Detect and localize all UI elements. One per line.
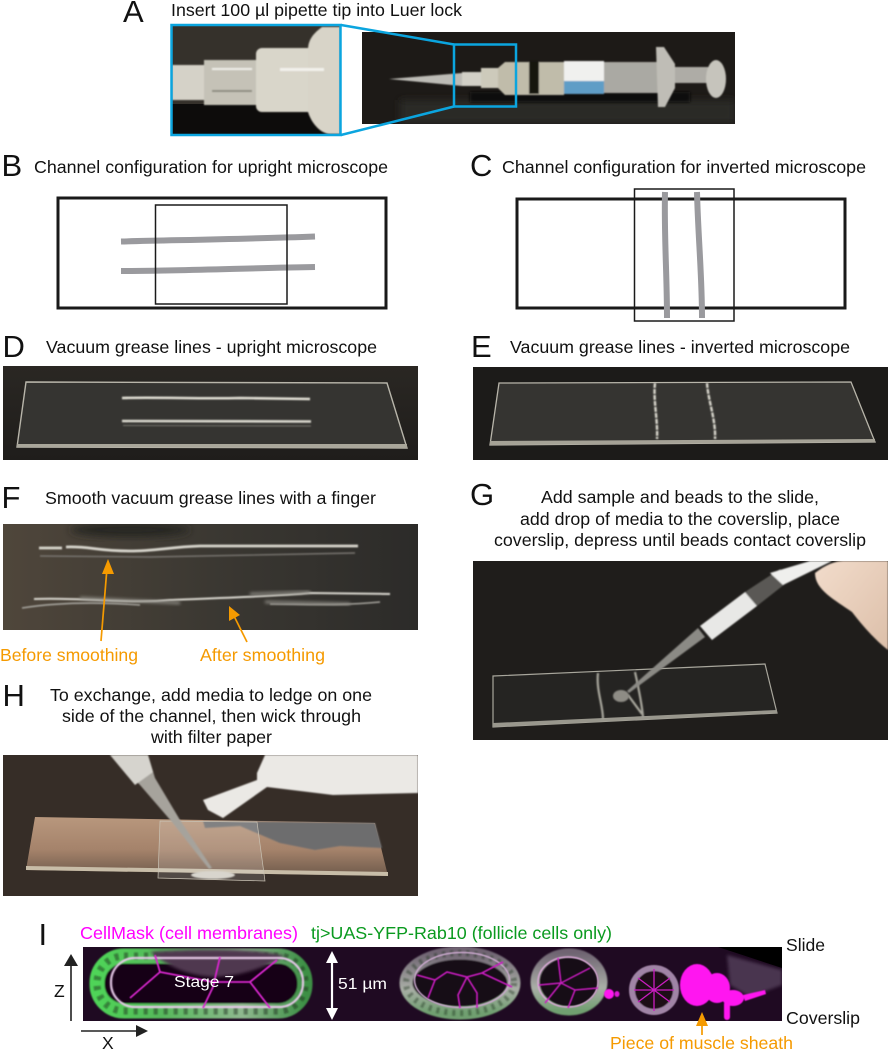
photo E <box>473 367 888 460</box>
heading G: Add sample and beads to the slide, <box>541 487 819 507</box>
muscle sheath <box>680 964 766 1020</box>
egg chamber: third <box>535 953 620 1011</box>
heading G: add drop of media to the coverslip, place <box>520 509 840 529</box>
label B: B <box>2 148 22 183</box>
label: 51 µm: 51 µm <box>338 976 387 993</box>
egg chamber: fourth <box>632 968 676 1012</box>
panel: B upright channel diagram <box>2 148 388 308</box>
egg chamber: second <box>406 952 514 1013</box>
heading E: Vacuum grease lines - inverted microscope <box>510 337 850 357</box>
legend: CellMask: CellMask (cell membranes) <box>80 923 298 943</box>
panel: H media exchange <box>2 678 418 896</box>
heading H: with filter paper <box>150 727 272 747</box>
panel: D grease lines upright <box>2 329 418 460</box>
photo H <box>3 755 418 896</box>
heading H: To exchange, add media to ledge on one <box>50 685 372 705</box>
label H: H <box>2 678 25 713</box>
heading G: coverslip, depress until beads contact coverslip <box>494 530 866 550</box>
heading H <box>50 685 372 747</box>
label I: I <box>38 917 47 952</box>
micrograph <box>83 947 782 1021</box>
label E: E <box>471 329 492 364</box>
dim follicle cells at right <box>727 955 782 997</box>
label F: F <box>2 480 20 515</box>
heading G <box>494 487 866 550</box>
heading F: Smooth vacuum grease lines with a finger <box>45 488 376 508</box>
heading B: Channel configuration for upright microscope <box>34 157 388 177</box>
photo D <box>3 366 418 460</box>
arrow: after smoothing <box>229 606 247 642</box>
panel: A pipette tip in Luer lock <box>123 0 735 135</box>
label C: C <box>470 148 492 183</box>
label: coverslip: Coverslip <box>786 1008 860 1028</box>
photo G <box>473 561 888 740</box>
arrow: muscle sheath <box>696 1012 708 1035</box>
heading H: side of the channel, then wick through <box>62 706 361 726</box>
black wedge <box>718 947 782 968</box>
axis arrow X <box>81 1025 148 1037</box>
photo: syringe <box>362 32 735 124</box>
heading C: Channel configuration for inverted microscope <box>502 157 866 177</box>
caption: after smoothing: After smoothing <box>200 645 325 665</box>
legend: YFP-Rab10: tj>UAS-YFP-Rab10 (follicle cells only) <box>311 923 612 943</box>
panel: I microscopy image <box>38 917 860 1050</box>
label: slide: Slide <box>786 935 825 955</box>
panel: G add sample and beads <box>470 477 888 740</box>
panel: F smoothing grease lines <box>0 480 418 665</box>
photo F <box>3 523 418 630</box>
label: stage 7: Stage 7 <box>174 974 234 991</box>
label G: G <box>470 477 494 512</box>
zoom connector lines <box>172 25 516 135</box>
axis label Z: Z <box>54 981 65 1001</box>
depth arrow <box>326 951 338 1020</box>
photo: Luer lock close-up inset <box>172 26 340 135</box>
egg chamber: stage 7 <box>97 949 305 1011</box>
arrow: before smoothing <box>101 559 114 641</box>
caption: before smoothing: Before smoothing <box>0 645 138 665</box>
axis arrow Z <box>64 954 78 1021</box>
label D: D <box>2 329 25 364</box>
diagram B <box>58 198 386 308</box>
panel: E grease lines inverted <box>471 329 888 460</box>
heading D: Vacuum grease lines - upright microscope <box>46 337 377 357</box>
panel: C inverted channel diagram <box>470 148 866 321</box>
diagram C <box>517 189 845 321</box>
heading A: Insert 100 µl pipette tip into Luer lock <box>171 0 462 20</box>
